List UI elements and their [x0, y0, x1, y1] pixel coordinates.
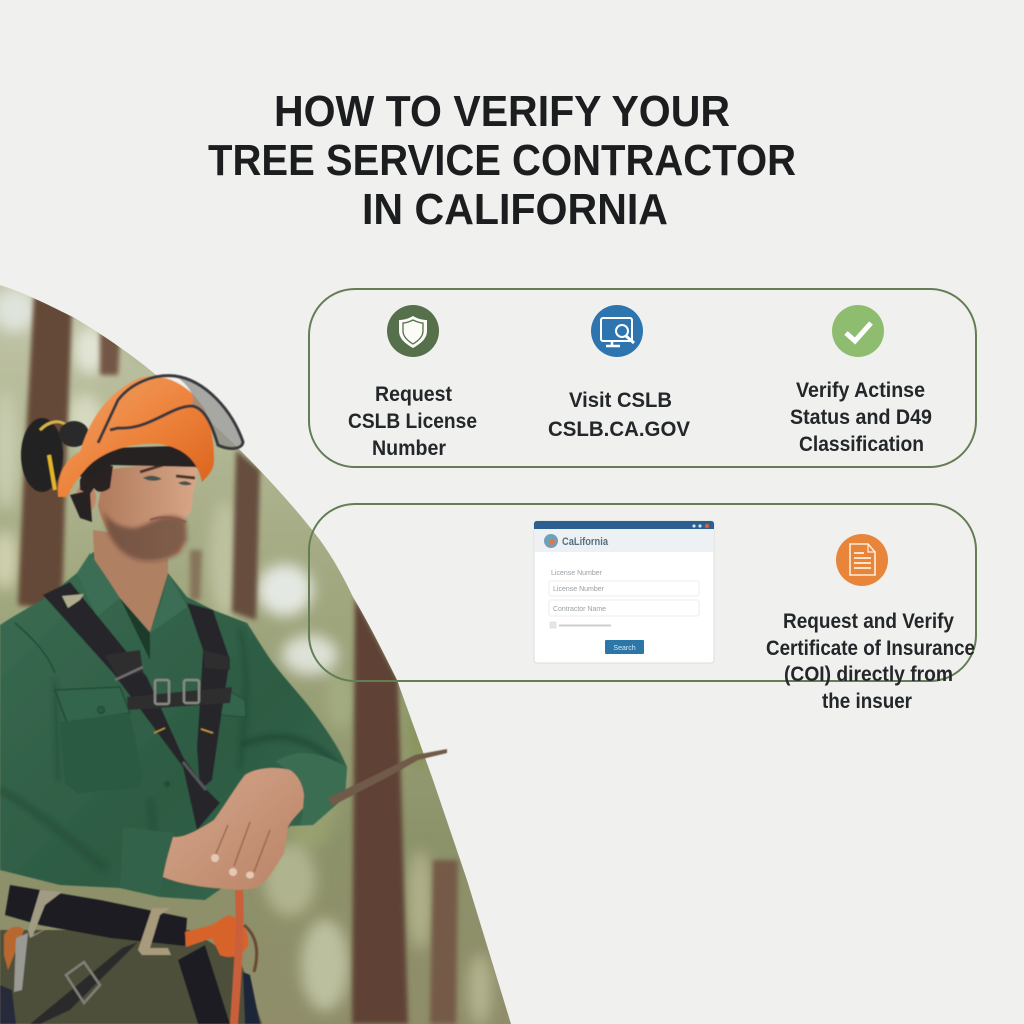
ear [76, 483, 96, 513]
head [21, 376, 243, 561]
icon: shield [387, 305, 439, 357]
step 2: visit CSLB: Visit CSLB [569, 389, 672, 412]
step 1: request license: Request [375, 383, 452, 406]
browser mockup: license search form: License Number [551, 568, 602, 577]
face [98, 462, 197, 561]
step 3: verify status: Status and D49 [790, 406, 932, 429]
browser mockup: license search form: CaLifornia [562, 536, 609, 548]
ear muff [21, 418, 89, 492]
step 3: verify status [790, 305, 932, 456]
icon: monitor with magnifier [591, 305, 643, 357]
browser mockup: license search form: Contractor Name [553, 604, 606, 613]
step 2: visit CSLB [548, 305, 690, 441]
belt, trousers and gear [0, 885, 262, 1024]
icon: document [836, 534, 888, 586]
title: IN CALIFORNIA [362, 185, 668, 234]
title: TREE SERVICE CONTRACTOR [208, 136, 796, 185]
forest photo background [0, 280, 520, 1024]
title: HOW TO VERIFY YOUR [274, 87, 730, 136]
eyes and brows [140, 465, 195, 522]
torso and shirt [0, 552, 347, 900]
panel: search and insurance [309, 504, 976, 713]
step 4: certificate of insurance: the insuer [822, 690, 912, 713]
browser mockup: license search form: Search [613, 645, 636, 652]
tree trunks [18, 295, 458, 1024]
title [208, 87, 796, 234]
step 4: certificate of insurance: Request and Verify [783, 610, 954, 633]
back of head [70, 490, 92, 522]
step 2: visit CSLB: CSLB.CA.GOV [548, 418, 690, 441]
browser mockup: license search form [534, 521, 714, 663]
step 3: verify status: Classification [799, 433, 924, 456]
chest pockets [55, 687, 246, 793]
step 4: certificate of insurance: (COI) directly from [784, 663, 953, 686]
step 4: certificate of insurance: Certificate of Insurance [766, 637, 975, 660]
stick [328, 749, 447, 806]
rope [234, 890, 240, 1024]
man: arborist [0, 376, 447, 1024]
step 4: certificate of insurance [766, 534, 975, 713]
browser mockup: license search form: License Number [553, 584, 604, 593]
icon: check mark [832, 305, 884, 357]
beard [103, 510, 187, 561]
shirt shading [0, 630, 338, 880]
hair [80, 466, 113, 494]
left cuff [120, 827, 175, 897]
step 1: request license: CSLB License [348, 410, 477, 433]
step 1: request license [348, 305, 477, 460]
helmet underside band [72, 445, 208, 478]
panel: steps 1 to 3 [309, 289, 976, 467]
neck and collar [77, 530, 187, 660]
harness straps [43, 582, 232, 830]
step 3: verify status: Verify Actinse [796, 379, 925, 402]
step 1: request license: Number [372, 437, 446, 460]
helmet [58, 377, 214, 497]
hands [163, 768, 304, 890]
visor [98, 376, 243, 448]
right cuff [275, 753, 347, 825]
